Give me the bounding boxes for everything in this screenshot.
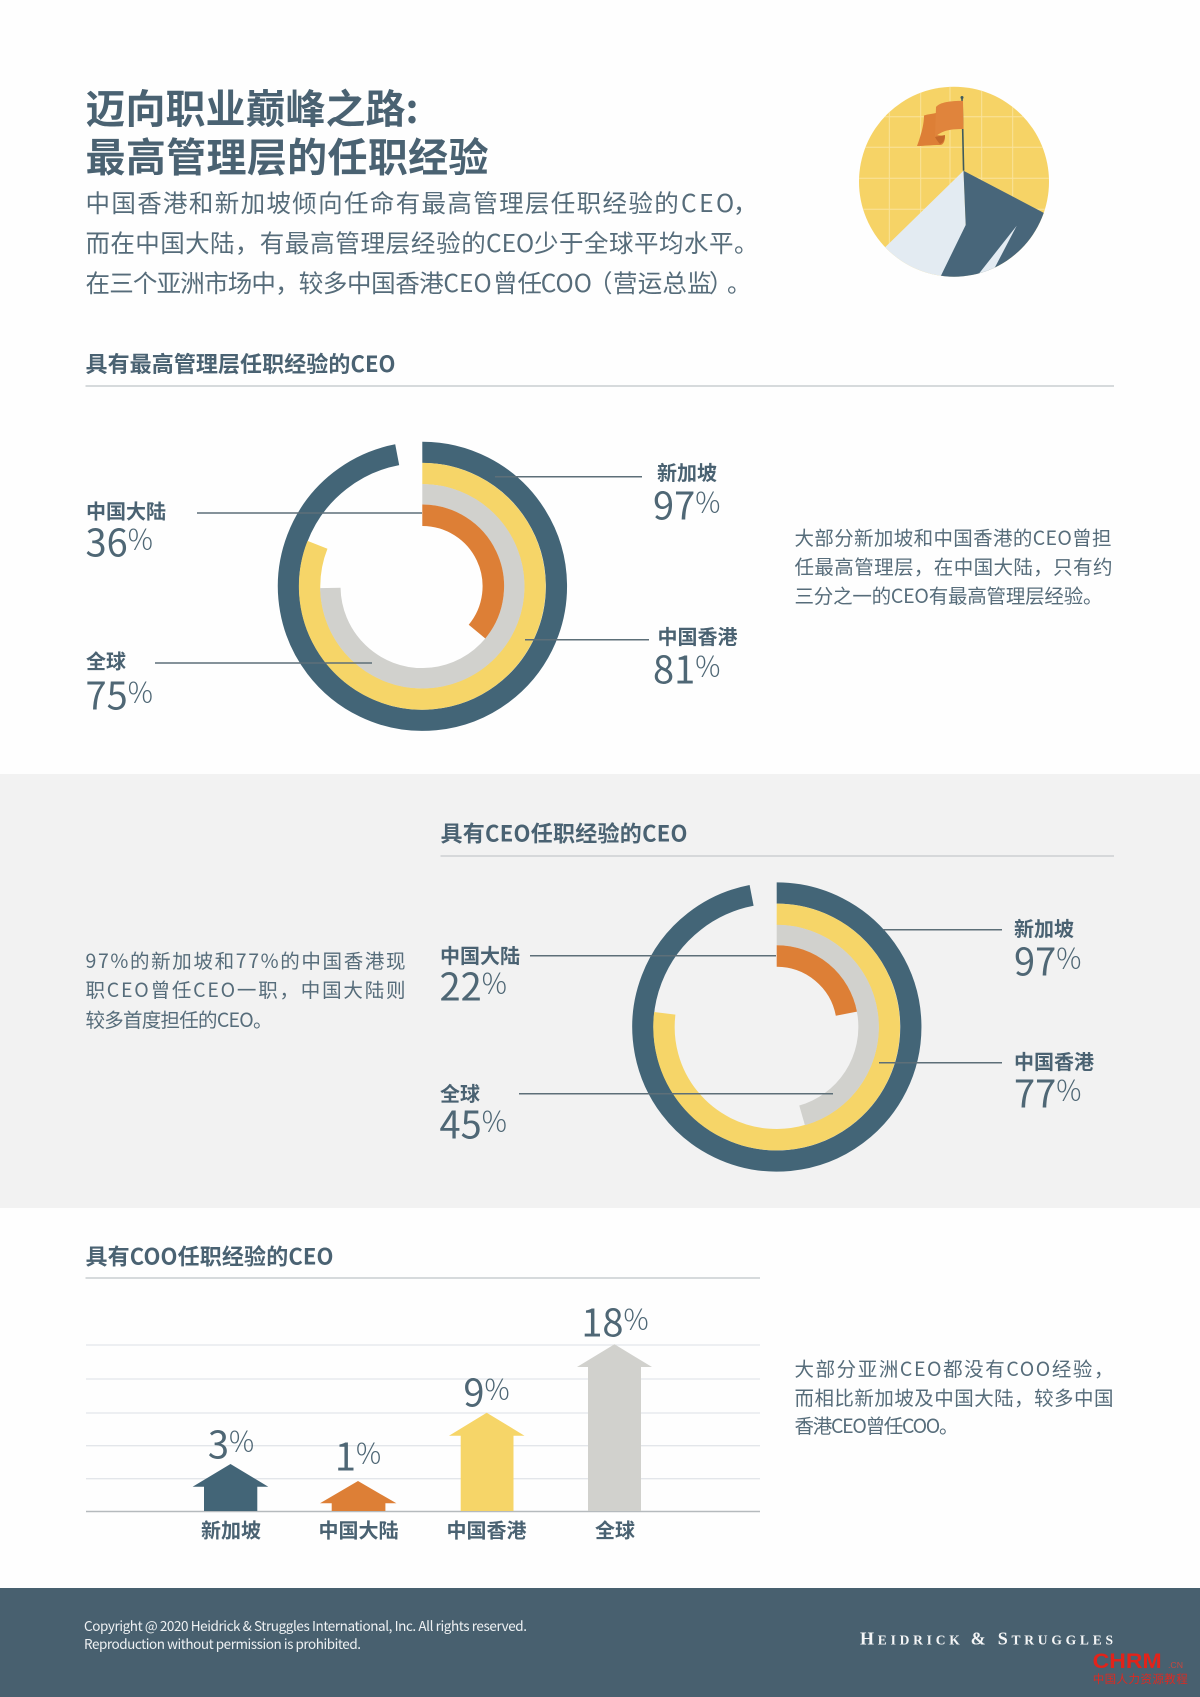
ring chart: CEO experience [643,893,911,1161]
text block: C-suite note: 任最高管理层，在中国大陆，只有约 [794,551,1112,580]
section heading: 具有最高管理层任职经验的CEO [86,347,396,379]
text block: COO note: 而相比新加坡及中国大陆，较多中国 [794,1382,1114,1411]
callout: global 75%: 75 [86,666,128,720]
title: 迈向职业巅峰之路: [86,77,418,135]
callout: Singapore 97%: 新加坡 [657,457,717,486]
text block: CEO note [86,945,406,1033]
panel: header [86,77,1065,300]
callout: global 75%: 全球 [86,646,126,674]
title [86,77,488,184]
callout: mainland China 22%: % [482,962,507,1002]
callout: global 45%: % [482,1100,507,1140]
callout: Singapore 97%: 新加坡 [1014,913,1074,942]
callout: mainland China 36%: 36 [86,512,128,568]
arrow: mainland China 1%: 中国大陆 [318,1514,398,1544]
callout: Singapore 97%: 97 [653,476,695,530]
intro text: 较多中国香港 [299,265,443,300]
arrow: global 18%: 18 [581,1292,624,1348]
callout: Singapore 97%: 97 [1014,932,1056,986]
callout: global 75% [86,646,372,720]
callout: Hong Kong 77%: % [1056,1070,1081,1110]
text block: C-suite note: 大部分新加坡和中国香港的CEO曾担 [794,522,1112,551]
ring chart: C-suite experience [288,452,556,720]
intro text [86,185,759,300]
arrow: global 18%: 全球 [595,1514,635,1544]
arrow: Hong Kong 9%: 中国香港 [446,1514,526,1544]
callout: Hong Kong 77%: 77 [1014,1064,1056,1118]
callout: global 75%: % [128,672,153,712]
text block: COO note: 大部分亚洲CEO都没有COO经验， [794,1353,1114,1382]
text block: C-suite note: 三分之一的CEO有最高管理层经验。 [794,580,1102,609]
callout: Hong Kong 81%: 81 [653,640,695,694]
arrow: Singapore 3%: 3 [208,1414,229,1470]
intro text: CEO [443,265,492,300]
intro text: （ [588,265,612,300]
arrow: mainland China 1%: 1 [335,1426,356,1482]
logo: Heidrick & Struggles: H EIDRICK & S TRUGGLES [860,1628,1113,1648]
text block: COO note: 香港CEO曾任COO。 [794,1410,958,1439]
panel: C-suite experience [86,347,1114,720]
callout: mainland China 22%: 中国大陆 [440,940,520,969]
callout: mainland China 36% [86,496,422,568]
callout: global 45%: 45 [440,1094,482,1150]
arrow: Hong Kong 9% [446,1362,526,1544]
callout: mainland China 22% [440,940,776,1012]
copyright text: Reproduction without permission is prohibited. [84,1633,361,1653]
section heading: 具有COO任职经验的CEO [86,1240,334,1272]
panel: footer [0,1588,1200,1697]
intro text: 中国香港和新加坡倾向任命有最高管理层任职经验的 [86,185,680,220]
intro text: 而在中国大陆， [86,225,260,260]
watermark: CHRM.CN: CHRM [1093,1650,1162,1673]
intro text: 在三个亚洲市场中， [86,265,299,300]
intro text: 营运总监 [613,265,712,300]
arrow chart: COO experience [86,1292,760,1544]
text block: CEO note: 较多首度担任的CEO。 [86,1004,272,1033]
arrow: global 18% [577,1292,652,1544]
intro text: 少于全球平均水平。 [534,225,759,260]
watermark: CHRM.CN: 中国人力资源教程 [1093,1671,1188,1687]
text block: CEO note: 职CEO曾任CEO一职，中国大陆则 [86,974,406,1003]
copyright text [84,1615,527,1653]
callout: Singapore 97%: % [695,482,720,522]
text block: COO note [794,1353,1114,1439]
callout: mainland China 22%: 22 [440,956,482,1012]
intro text: COO [541,265,592,300]
watermark: CHRM.CN: .CN [1168,1661,1183,1670]
arrow: global 18%: % [624,1298,649,1338]
intro text: CEO [486,225,534,260]
arrow: Singapore 3% [193,1414,268,1544]
callout: Singapore 97% [495,457,720,530]
arrow: Hong Kong 9%: % [484,1368,510,1408]
text block: CEO note: 97%的新加坡和77%的中国香港现 [86,945,406,974]
panel: CEO experience [0,774,1200,1208]
callout: Hong Kong 81%: % [695,646,720,686]
callout: mainland China 36%: 中国大陆 [86,496,166,524]
watermark: CHRM.CN [1093,1650,1188,1687]
callout: Hong Kong 81% [525,621,738,694]
intro text: CEO [681,185,737,220]
arrow: mainland China 1%: % [356,1432,381,1472]
callout: global 45%: 全球 [440,1078,480,1107]
callout: mainland China 36%: % [128,518,153,558]
intro text: 有最高管理层经验的 [260,225,487,260]
arrow: mainland China 1% [318,1426,398,1544]
section heading: 具有CEO任职经验的CEO [440,816,688,848]
intro text: 。 [727,265,752,300]
intro text: 曾任 [493,265,542,300]
callout: Hong Kong 77% [879,1046,1094,1118]
icon: mountain peak with flag [859,86,1049,277]
intro text: ） [709,265,734,300]
callout: Hong Kong 77%: 中国香港 [1014,1046,1094,1075]
intro text: ， [733,185,758,220]
title: 最高管理层的任职经验 [86,126,488,184]
copyright text: Copyright @ 2020 Heidrick & Struggles International, Inc. All rights reserved. [84,1615,527,1635]
callout: Singapore 97% [883,913,1081,986]
arrow: Singapore 3%: % [229,1420,254,1460]
callout: Hong Kong 81%: 中国香港 [658,621,738,650]
text block: C-suite note [794,522,1112,609]
panel: COO experience [86,1240,1114,1544]
arrow: Singapore 3%: 新加坡 [201,1514,261,1544]
callout: global 45% [440,1078,833,1150]
arrow: Hong Kong 9%: 9 [463,1362,484,1418]
callout: Singapore 97%: % [1056,938,1081,978]
